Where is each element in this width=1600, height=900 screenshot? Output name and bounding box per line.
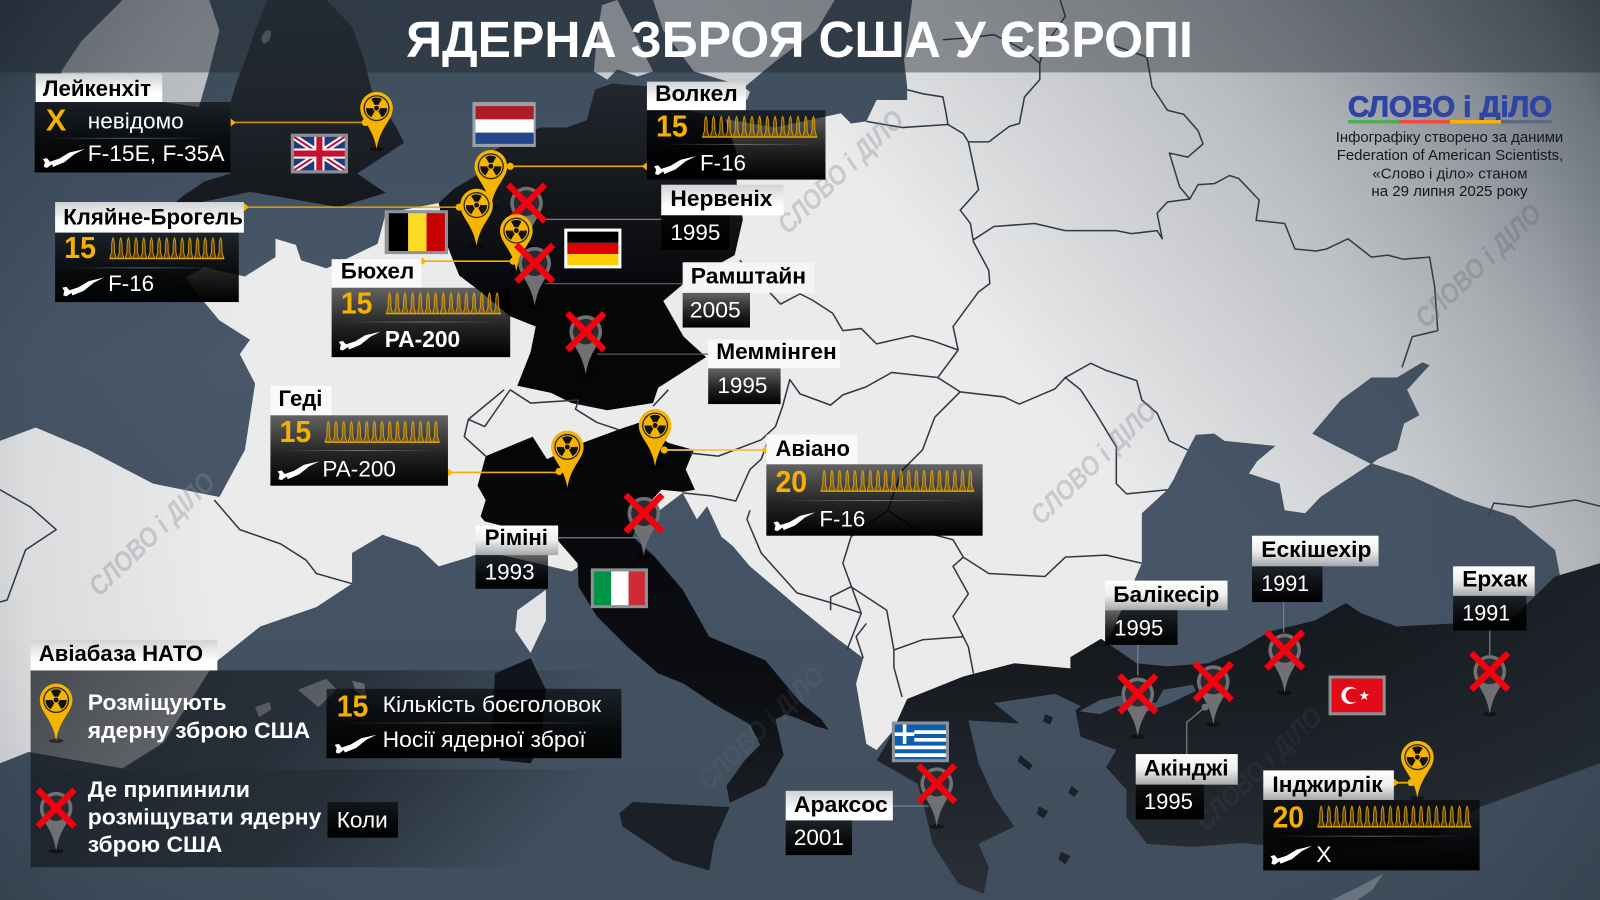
year panel: 1995 — [1144, 789, 1193, 814]
title band — [0, 0, 1600, 72]
name label: Бюхел — [341, 259, 414, 284]
info panel — [766, 464, 983, 536]
year panel: 1991 — [1261, 571, 1309, 596]
name label: Ерхак — [1462, 567, 1528, 592]
flag: Belgium — [385, 210, 448, 254]
pin — [626, 495, 662, 558]
connector — [664, 449, 766, 451]
connector — [541, 218, 661, 220]
flag: Italy — [591, 568, 648, 608]
year panel — [661, 215, 730, 250]
connector — [244, 206, 459, 208]
country borders — [0, 0, 1600, 697]
legend heading: Авіабаза НАТО — [39, 641, 203, 666]
pin — [918, 765, 955, 829]
base: Erhac — [1453, 566, 1535, 717]
flag: Greece — [892, 721, 949, 762]
legend key panel: 15 — [337, 689, 368, 723]
pin — [500, 214, 533, 274]
year panel — [476, 555, 548, 589]
base: Lakenheath — [35, 73, 393, 172]
name label — [647, 81, 746, 110]
connector — [448, 471, 561, 473]
year panel: 1991 — [1462, 600, 1510, 625]
legend key panel: Кількість боєголовок — [383, 692, 601, 717]
Italy — [478, 422, 829, 803]
pin — [551, 431, 584, 490]
legend year key — [328, 802, 398, 838]
name label: Меммінген — [716, 339, 837, 364]
base: Rimini — [476, 495, 662, 589]
legend pin: nuclear — [40, 684, 72, 743]
connector — [893, 805, 929, 807]
name label — [1136, 754, 1238, 785]
legend — [31, 640, 621, 867]
connector — [1489, 631, 1491, 655]
year panel: 1995 — [1114, 616, 1163, 641]
name label — [1453, 566, 1535, 596]
year panel: 1995 — [717, 373, 767, 398]
United Kingdom — [168, 0, 404, 209]
name label: Ескішехір — [1261, 537, 1371, 562]
legend text: hosting — [87, 690, 310, 743]
legend key panel: Носії ядерної зброї — [383, 727, 586, 752]
connector — [231, 121, 372, 123]
info panel: F-16 — [819, 507, 865, 532]
source note: «Слово і діло» станом — [1372, 167, 1528, 183]
logo: СЛОВО і ДіЛО — [1348, 91, 1552, 123]
title: ЯДЕРНА ЗБРОЯ США У ЄВРОПІ — [406, 11, 1193, 68]
pin — [1119, 676, 1156, 739]
name label: Рамштайн — [691, 264, 806, 289]
name label: Нервеніх — [670, 186, 773, 211]
Sea of Marmara — [1080, 685, 1196, 714]
Scottish loch — [260, 29, 273, 45]
info panel: X — [46, 104, 67, 138]
legend band: hosting — [31, 670, 602, 769]
legend text: stopped — [88, 777, 322, 857]
pin — [508, 185, 545, 248]
info panel: 20 — [1272, 801, 1304, 835]
name label: Волкел — [655, 81, 738, 106]
base: Araxos — [786, 765, 955, 855]
info panel: F-16 — [700, 150, 746, 175]
base: Eskisehir — [1252, 536, 1379, 695]
info panel: 15 — [280, 415, 311, 449]
info panel: 15 — [341, 286, 372, 320]
Sea of Azov — [1312, 362, 1430, 464]
info panel — [55, 231, 239, 302]
watermarks: СЛОВО і ДІЛО — [1189, 701, 1328, 837]
legend band: stopped — [31, 769, 602, 867]
name label — [683, 262, 814, 293]
name label: Ріміні — [485, 525, 548, 550]
pin — [516, 245, 553, 308]
info panel — [332, 286, 510, 357]
pin — [1401, 741, 1434, 800]
source note: на 29 липня 2025 року — [1371, 184, 1528, 200]
info panel: X — [1316, 842, 1332, 867]
legend text: hosting: ядерну зброю США — [87, 718, 310, 743]
info panel — [647, 110, 826, 180]
legend pin: stopped — [38, 790, 74, 853]
connector — [1283, 602, 1285, 633]
info panel: 20 — [776, 465, 807, 499]
watermarks: СЛОВО і ДІЛО — [1024, 395, 1163, 530]
base: Akinci — [1136, 663, 1238, 819]
connector — [421, 260, 513, 262]
info panel — [1263, 800, 1480, 870]
Mediterranean islands — [515, 590, 546, 653]
legend key panel — [327, 689, 621, 758]
legend year key: Коли — [337, 808, 388, 833]
name label: Акінджі — [1144, 756, 1229, 781]
name label: Авіано — [776, 436, 850, 461]
flag: Turkey — [1329, 676, 1386, 715]
name label: Балікесір — [1113, 582, 1219, 607]
Cyprus — [1332, 873, 1384, 900]
pin — [639, 409, 671, 469]
name label: Кляйне-Брогель — [63, 204, 243, 229]
name label — [270, 386, 332, 415]
connector — [1187, 707, 1205, 754]
pin — [1195, 663, 1232, 727]
name label — [1263, 770, 1394, 800]
base: Nörvenich — [508, 185, 784, 250]
year panel — [1105, 610, 1178, 645]
legend text: stopped: розміщувати ядерну — [88, 804, 322, 829]
year panel — [1136, 785, 1204, 819]
Netherlands, Belgium, Germany — [439, 84, 743, 410]
name label — [476, 525, 558, 555]
year panel: 1995 — [670, 220, 720, 245]
flag: United Kingdom — [291, 134, 348, 173]
Black Sea — [1106, 434, 1560, 671]
year panel — [1453, 596, 1527, 631]
base: Büchel — [332, 214, 533, 357]
watermarks: СЛОВО і ДІЛО — [1409, 198, 1548, 333]
name label — [1252, 536, 1379, 566]
name label: Геді — [279, 386, 322, 411]
pin — [474, 150, 507, 209]
connector — [546, 283, 683, 285]
name label — [332, 259, 421, 288]
base: Volkel — [474, 81, 826, 209]
legend text: hosting: Розміщують — [88, 690, 227, 715]
year panel: 1993 — [485, 560, 535, 585]
info panel — [35, 102, 231, 172]
info panel: 15 — [656, 110, 688, 144]
watermarks: СЛОВО і ДІЛО — [691, 660, 830, 796]
info panel: F-15E, F-35A — [88, 141, 225, 166]
info panel — [270, 415, 448, 486]
connector — [557, 537, 638, 539]
year panel — [708, 368, 781, 404]
Ireland — [61, 0, 219, 107]
year panel — [683, 293, 750, 328]
Sicily — [619, 802, 730, 870]
info panel: PA-200 — [322, 457, 396, 482]
base: Kleine Brogel — [55, 189, 493, 302]
base: Balikesir — [1105, 581, 1228, 739]
year panel — [1252, 566, 1322, 602]
connector — [1394, 782, 1413, 784]
info panel: PA-200 — [385, 326, 460, 352]
connector — [1137, 645, 1139, 676]
year panel: 2005 — [690, 297, 741, 322]
base: Ramstein — [516, 245, 814, 328]
pin — [1266, 632, 1303, 695]
name label: Араксос — [794, 792, 888, 817]
name label — [661, 185, 784, 215]
info panel: F-16 — [108, 271, 154, 296]
flag: Netherlands — [472, 102, 536, 147]
base: Aviano — [639, 409, 983, 536]
pin — [460, 189, 493, 248]
info panel: невідомо — [88, 109, 184, 134]
pin — [360, 92, 393, 151]
base: Ghedi — [270, 386, 584, 490]
flag: Germany — [564, 229, 621, 268]
name label: Лейкенхіт — [43, 76, 151, 101]
legend text: stopped: Де припинили — [88, 777, 250, 802]
watermarks: СЛОВО і ДІЛО — [771, 104, 910, 240]
connector — [507, 165, 647, 167]
name label: Інджирлік — [1272, 772, 1383, 797]
Denmark and Sweden — [594, 0, 835, 100]
legend text: stopped: зброю США — [88, 832, 222, 857]
Greece and Turkey — [877, 563, 1600, 894]
watermarks — [82, 104, 1548, 837]
year panel — [786, 820, 852, 855]
Aegean islands — [1017, 714, 1079, 864]
year panel: 2001 — [794, 825, 844, 850]
name label — [766, 435, 857, 464]
source note: Federation of American Scientists, — [1337, 148, 1563, 164]
base: Incirlik — [1263, 741, 1480, 870]
info panel: 15 — [64, 231, 96, 265]
watermarks: СЛОВО і ДІЛО — [82, 466, 221, 602]
source note — [1336, 130, 1563, 200]
source note: Інфографіку створено за даними — [1336, 130, 1563, 146]
Sardinia — [492, 658, 546, 763]
base: Memmingen — [567, 313, 840, 404]
connector — [597, 353, 708, 355]
pin — [1471, 653, 1508, 717]
pin — [567, 313, 604, 377]
